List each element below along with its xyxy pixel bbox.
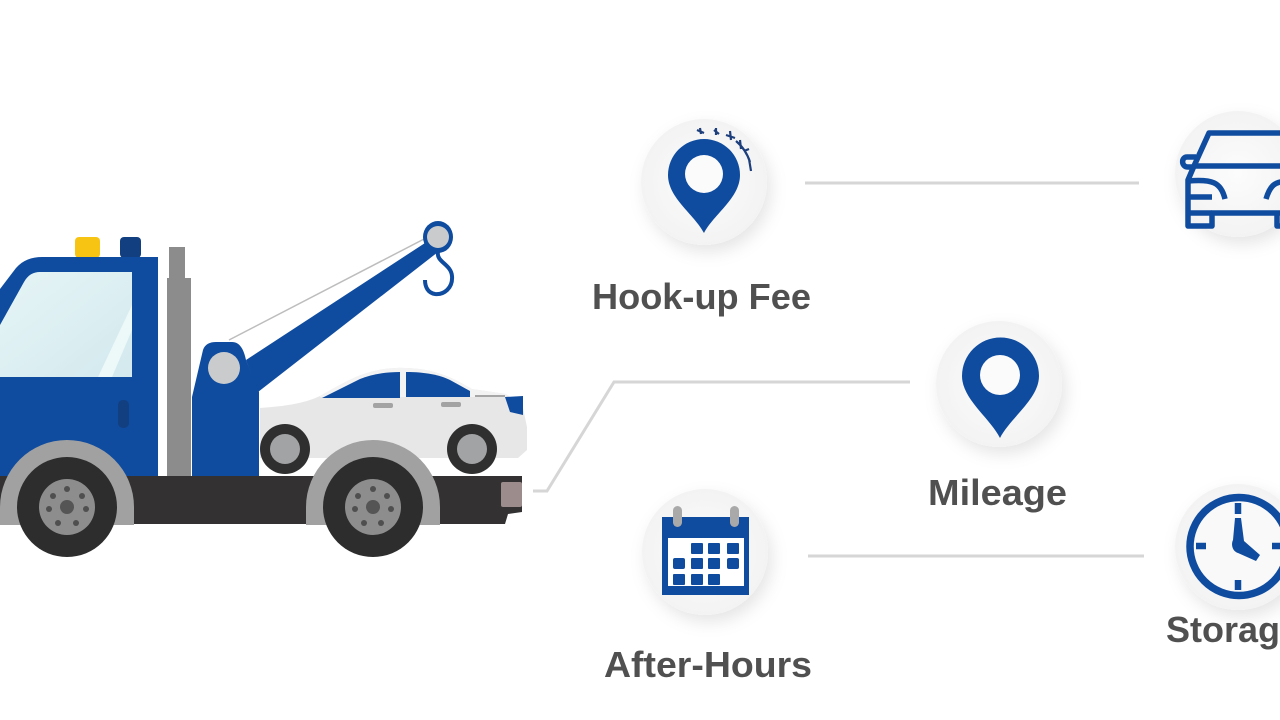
item: after-hours [604,489,812,685]
car wheels [260,424,497,474]
boom cable [229,238,426,340]
car upper highlight [320,368,510,397]
beacon lights [75,237,141,258]
icon: clock [1190,498,1280,596]
door handles [373,402,461,408]
chassis [0,476,522,524]
icon circle: hook-up [641,119,767,245]
rear wheel [323,457,423,557]
connector lines [533,183,1144,556]
hook [425,252,452,294]
crane pivot [208,352,240,384]
car belt line [475,395,505,397]
tow boom [246,243,438,392]
cab window [0,272,132,377]
icon circle: mileage [936,321,1062,447]
car windows [322,372,523,415]
icon: calendar [662,506,749,595]
car body [260,368,527,458]
window highlight [98,305,132,377]
item: vehicle type [1175,111,1280,237]
tow truck illustration [0,221,527,557]
icon circle: after-hours [642,489,768,615]
label: hook-up fee: Hook-up Fee [592,276,811,317]
icon: map pin [962,338,1039,438]
icon circle: car [1175,111,1280,237]
icon: scale ticks [697,128,751,171]
item: mileage [928,321,1067,513]
item: hook-up fee [592,119,811,317]
cab [0,257,158,476]
door handle [118,400,129,428]
towed car [260,368,527,474]
label: mileage: Mileage [928,472,1067,513]
icon: map pin [668,139,740,233]
boom end pulley [423,221,453,253]
item: storage [1166,484,1280,650]
front wheel [17,457,117,557]
icon: car front [1183,133,1280,226]
crane base [192,342,259,476]
fenders [0,440,440,525]
tail light [501,482,522,507]
label: after-hours: After-Hours [604,644,812,685]
icon circle: clock [1175,484,1280,610]
rear column [167,247,191,476]
